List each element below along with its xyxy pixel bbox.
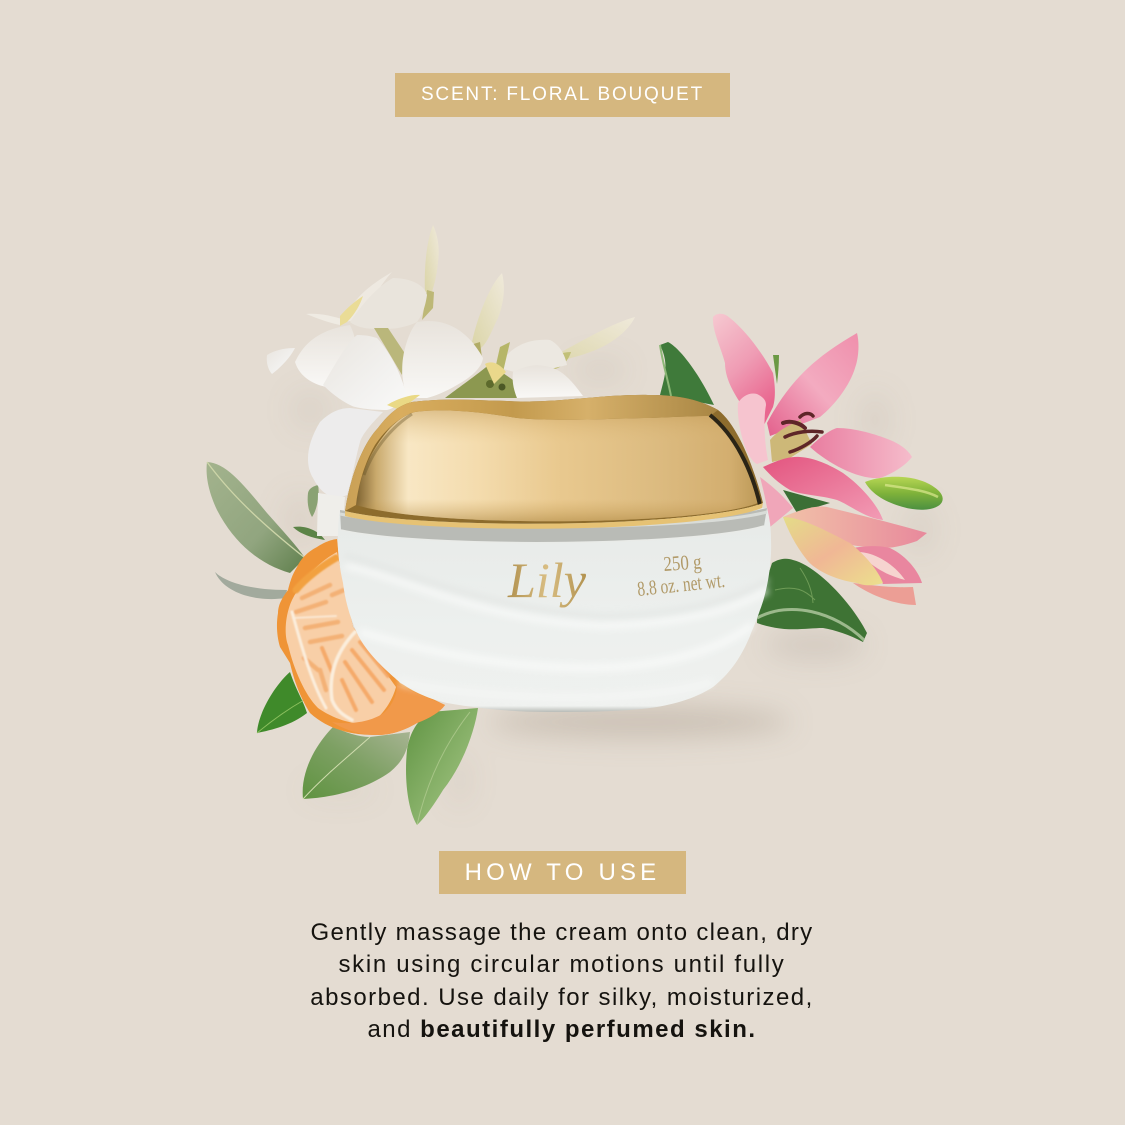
instructions text: Gently massage the cream onto clean, dry — [311, 918, 813, 946]
mandarin flesh texture — [292, 558, 388, 720]
instructions text: and beautifully perfumed skin. — [367, 1016, 757, 1043]
jar label: Lily: Lily — [507, 552, 587, 608]
instructions text — [310, 918, 814, 1043]
how to use tag: HOW TO USE — [465, 859, 660, 886]
jar label: weight — [636, 549, 726, 601]
large petals — [308, 321, 483, 536]
right flower — [470, 340, 583, 398]
jar body — [338, 508, 771, 712]
flower buds — [422, 225, 635, 369]
icon: white flowers — [267, 225, 635, 536]
cast shadows — [280, 358, 936, 808]
icon: pink lily — [713, 314, 927, 605]
icon: mandarin — [277, 539, 445, 735]
lid rim — [345, 395, 718, 511]
lily stamens — [783, 413, 822, 452]
scent tag: SCENT: FLORAL BOUQUET — [421, 84, 704, 105]
instructions text: absorbed. Use daily for silky, moisturized, — [310, 984, 814, 1010]
top left flower — [267, 272, 427, 387]
center green stems — [374, 328, 517, 398]
jar swirl shading — [345, 556, 768, 697]
how to use tag — [439, 851, 686, 894]
instructions text: skin using circular motions until fully — [338, 951, 786, 978]
jar label: weight: 250 g — [663, 549, 703, 576]
jar lid — [345, 395, 763, 529]
icon: green leaves — [207, 342, 943, 825]
scent tag — [395, 73, 730, 117]
jar label: weight: 8.8 oz. net wt. — [636, 568, 726, 601]
